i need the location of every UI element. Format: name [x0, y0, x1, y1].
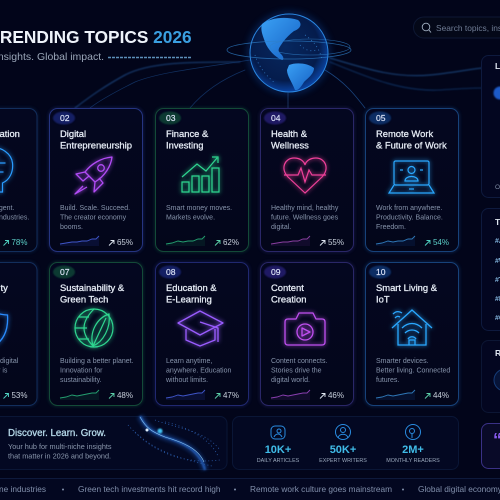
card title: & Future of Work [376, 140, 447, 150]
trend [320, 391, 344, 400]
trend: 78% [11, 238, 28, 247]
number badge: 07 [60, 267, 70, 277]
card 05 [366, 108, 458, 252]
card title: E-Learning [166, 294, 212, 304]
card title: Investing [166, 140, 204, 150]
number badge [159, 266, 181, 278]
sparkline [166, 390, 205, 400]
description: Smart money moves. [166, 205, 232, 212]
description: Markets evolve. [166, 214, 215, 222]
heading: Discover. Learn. Grow. [8, 428, 106, 439]
description: Smarter devices. [376, 358, 429, 365]
trend [4, 391, 28, 400]
number badge: 03 [166, 113, 176, 123]
search box [414, 17, 500, 38]
number badge [53, 112, 75, 124]
card title: Creation [271, 294, 306, 304]
trend: 48% [117, 391, 133, 400]
trend [425, 238, 449, 247]
card title: Digital [60, 128, 86, 139]
description: Work from anywhere. [376, 205, 442, 212]
sparkline [60, 236, 99, 246]
card title: Green Tech [60, 294, 108, 304]
card 08 [156, 262, 248, 406]
description: Healthy mind, healthy [271, 205, 338, 212]
card 02 [50, 108, 142, 252]
description: Content connects. [271, 358, 327, 365]
card 07 [50, 262, 142, 406]
stat: expert writers: EXPERT WRITERS [319, 458, 367, 464]
sparkline [271, 236, 310, 246]
banner: discover [0, 416, 227, 470]
card 03 [156, 108, 248, 252]
south america [287, 63, 314, 90]
icon: bar chart growth [182, 157, 219, 192]
sparkline [60, 390, 99, 400]
panel: stats [232, 416, 458, 470]
description: sustainability. [60, 377, 102, 384]
stat: expert writers: 50K+ [330, 444, 356, 456]
description: futures. [376, 377, 399, 384]
north america [261, 18, 301, 60]
description: booms. [60, 224, 83, 231]
stat: daily articles [257, 426, 300, 464]
icon: rocket [75, 157, 112, 194]
number badge: 05 [376, 113, 386, 123]
news ticker [0, 478, 500, 500]
number badge [369, 266, 391, 278]
news ticker: Green tech investments hit record high [78, 484, 221, 494]
card title: IoT [376, 294, 390, 304]
stat: expert writers [319, 424, 367, 464]
trend [215, 238, 239, 247]
panel: trending tags [482, 208, 500, 330]
trend: 46% [328, 391, 344, 400]
panel: quote [482, 424, 500, 468]
number badge [369, 112, 391, 124]
trend [320, 238, 344, 247]
stat: monthly readers: MONTHLY READERS [386, 458, 440, 464]
card 06 [0, 262, 37, 406]
trend: 62% [223, 238, 239, 247]
stat: monthly readers [386, 424, 440, 464]
sparkline [376, 390, 415, 400]
number badge [159, 112, 181, 124]
card 09 [260, 262, 354, 406]
sparkline [271, 390, 310, 400]
number badge: 09 [271, 267, 281, 277]
description: Building a better planet. [60, 358, 134, 365]
trend [4, 238, 28, 247]
card title: Finance & [166, 128, 208, 139]
number badge: 10 [376, 267, 386, 277]
sparkline [376, 236, 415, 246]
number badge [264, 266, 286, 278]
orbit ring [227, 39, 351, 59]
description: without limits. [165, 377, 208, 384]
description: anywhere. Education [166, 368, 231, 374]
card title: Sustainability & [60, 282, 124, 293]
card title: Health & [271, 128, 307, 139]
trend [425, 391, 449, 400]
description: Better living. Connected [376, 368, 450, 374]
card title: Wellness [271, 140, 309, 150]
trend [109, 391, 133, 400]
globe [227, 10, 351, 96]
ocean city lights [255, 35, 322, 83]
icon: heart pulse [284, 158, 326, 193]
description: digital. [271, 224, 291, 231]
number badge [53, 266, 75, 278]
trend: 53% [11, 391, 28, 400]
icon: camera play [285, 313, 325, 345]
card title: Smart Living & [376, 282, 437, 293]
stat: daily articles: DAILY ARTICLES [257, 458, 300, 464]
card 01 [0, 108, 37, 252]
trend: 65% [117, 238, 133, 247]
stat: monthly readers: 2M+ [402, 444, 424, 456]
decorative waveform [108, 56, 192, 58]
trend: 54% [433, 238, 449, 247]
news ticker: Global digital economy [418, 484, 500, 494]
card 04 [260, 108, 354, 252]
text: that matter in 2026 and beyond. [8, 452, 111, 461]
card title: Remote Work [376, 128, 433, 139]
news ticker: Remote work culture goes mainstream [250, 484, 392, 494]
number badge: 08 [166, 267, 176, 277]
stat: daily articles: 10K+ [265, 444, 291, 456]
card title: Entrepreneurship [60, 140, 132, 150]
number badge: 04 [271, 113, 281, 123]
icon: laptop [389, 161, 434, 193]
description: Productivity. Balance. [376, 214, 443, 222]
description: Innovation for [60, 368, 103, 374]
description: Build. Scale. Succeed. [60, 205, 130, 212]
icon: leaf globe [75, 309, 113, 347]
description: The creator economy [60, 214, 127, 222]
description: Freedom. [376, 224, 406, 231]
trend: 44% [433, 391, 449, 400]
card title: Education & [166, 282, 217, 293]
trend [109, 238, 133, 247]
icon: smart home [392, 310, 432, 345]
news ticker: ne industries [0, 484, 46, 494]
icon: brain [0, 148, 13, 192]
icon: shield [0, 310, 8, 348]
card 10 [366, 262, 458, 406]
flow lines from globe [75, 58, 482, 112]
description: digital world. [271, 377, 310, 384]
description: Stories drive the [271, 368, 322, 374]
sparkline [166, 236, 205, 246]
card title: Content [271, 282, 304, 293]
number badge: 02 [60, 113, 70, 123]
trend: 47% [223, 391, 239, 400]
text: Your hub for multi-niche insights [8, 442, 112, 451]
panel: reader stat [482, 340, 500, 412]
trend: 55% [328, 238, 344, 247]
panel: live [482, 56, 500, 198]
description: Learn anytime, [166, 358, 212, 365]
swirl graphic [128, 416, 220, 470]
trend [215, 391, 239, 400]
number badge [264, 112, 286, 124]
icon: graduation cap [178, 311, 223, 346]
description: future. Wellness goes [271, 214, 339, 222]
